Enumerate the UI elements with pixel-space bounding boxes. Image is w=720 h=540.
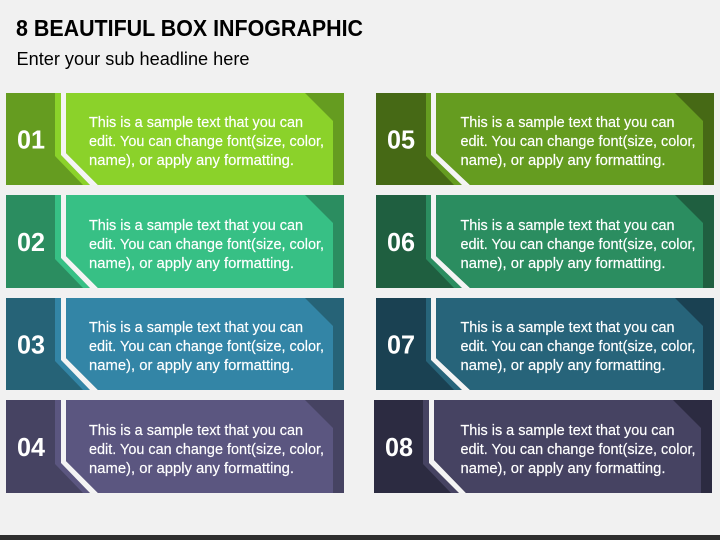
sub headline: Enter your sub headline here bbox=[16, 48, 250, 69]
panel: box 01 bbox=[6, 93, 344, 185]
text block 04: This is a sample text that you can bbox=[89, 422, 303, 439]
text block 07 bbox=[460, 319, 696, 374]
title: 8 BEAUTIFUL BOX INFOGRAPHIC bbox=[16, 15, 363, 41]
text block 01 bbox=[89, 114, 324, 169]
text block 05 bbox=[460, 114, 696, 169]
text block 08 bbox=[460, 422, 696, 477]
text block 08: This is a sample text that you can bbox=[460, 422, 674, 439]
text block 08: name), or apply any formatting. bbox=[460, 460, 666, 477]
text block 07: This is a sample text that you can bbox=[460, 319, 674, 336]
text block 06: edit. You can change font(size, color, bbox=[460, 236, 696, 253]
text block 03 bbox=[89, 319, 324, 374]
panel: box 04 bbox=[6, 400, 344, 493]
panel: box 08 bbox=[374, 400, 712, 493]
text block 01: name), or apply any formatting. bbox=[89, 152, 294, 169]
text block 05: This is a sample text that you can bbox=[460, 114, 674, 131]
text block 04 bbox=[89, 422, 324, 477]
number 01: 01 bbox=[17, 124, 45, 154]
number 03: 03 bbox=[17, 330, 45, 360]
text block 01: This is a sample text that you can bbox=[89, 114, 303, 131]
text block 02: name), or apply any formatting. bbox=[89, 255, 294, 272]
text block 06: name), or apply any formatting. bbox=[460, 255, 666, 272]
panel: box 05 bbox=[376, 93, 714, 185]
footer bar bbox=[0, 535, 720, 540]
panel: box 02 bbox=[6, 195, 344, 288]
panel: box 06 bbox=[376, 195, 714, 288]
text block 03: name), or apply any formatting. bbox=[89, 357, 294, 374]
number 04: 04 bbox=[17, 432, 46, 462]
text block 07: edit. You can change font(size, color, bbox=[460, 338, 696, 355]
text block 08: edit. You can change font(size, color, bbox=[460, 441, 696, 458]
text block 05: name), or apply any formatting. bbox=[460, 152, 666, 169]
number 07: 07 bbox=[387, 330, 415, 360]
number 06: 06 bbox=[387, 227, 415, 257]
panel: box 03 bbox=[6, 298, 344, 390]
panel: box 07 bbox=[376, 298, 714, 390]
text block 07: name), or apply any formatting. bbox=[460, 357, 666, 374]
text block 03: This is a sample text that you can bbox=[89, 319, 303, 336]
number 05: 05 bbox=[387, 124, 415, 154]
text block 04: edit. You can change font(size, color, bbox=[89, 441, 324, 458]
text block 03: edit. You can change font(size, color, bbox=[89, 338, 324, 355]
text block 04: name), or apply any formatting. bbox=[89, 460, 294, 477]
text block 05: edit. You can change font(size, color, bbox=[460, 133, 696, 150]
text block 02 bbox=[89, 217, 324, 272]
text block 02: edit. You can change font(size, color, bbox=[89, 236, 324, 253]
number 08: 08 bbox=[385, 432, 413, 462]
text block 01: edit. You can change font(size, color, bbox=[89, 133, 324, 150]
text block 02: This is a sample text that you can bbox=[89, 217, 303, 234]
number 02: 02 bbox=[17, 227, 45, 257]
text block 06: This is a sample text that you can bbox=[460, 217, 674, 234]
text block 06 bbox=[460, 217, 696, 272]
